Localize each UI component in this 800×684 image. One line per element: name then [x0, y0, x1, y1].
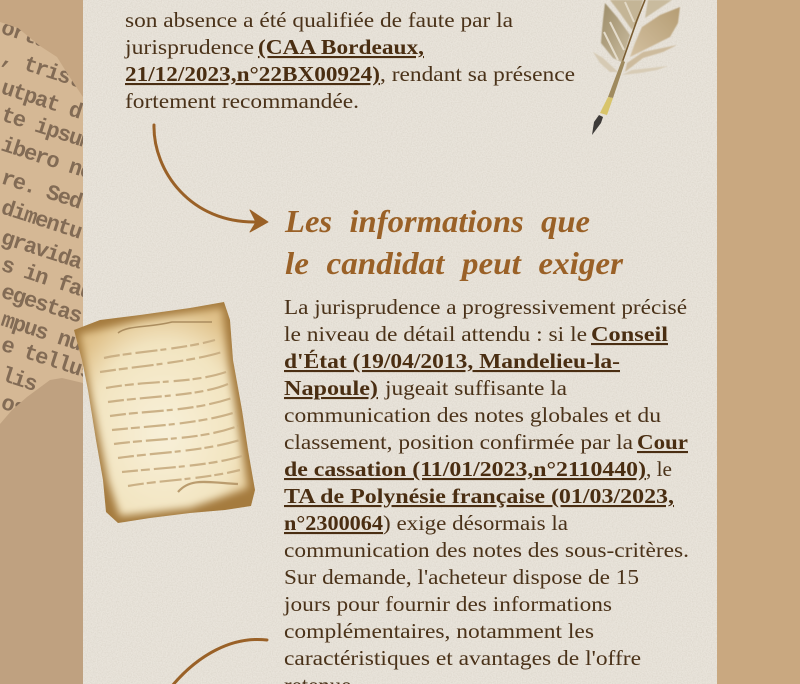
arrow: curved bottom [172, 639, 267, 684]
torn newspaper scrap: s in fauc [0, 253, 107, 310]
text block: jurisprudence paragraph: communication des notes des sous-critères. [284, 538, 689, 562]
text block: top paragraph: 21/12/2023,n°22BX00924) [125, 62, 380, 86]
torn newspaper scrap: dimentu [0, 196, 84, 245]
heading: le candidat peut exiger [285, 245, 624, 281]
text block: top paragraph [124, 8, 575, 113]
text block: jurisprudence paragraph: caractéristiques et avantages de l'offre [284, 646, 641, 670]
torn newspaper scrap [0, 22, 83, 684]
icon: feather quill [592, 0, 680, 135]
text block: jurisprudence paragraph: TA de Polynésie française (01/03/2023, [284, 484, 674, 508]
text block: top paragraph: , rendant sa présence [380, 62, 575, 86]
torn newspaper scrap: utpat d [0, 76, 84, 125]
heading [284, 203, 624, 281]
arrow: curved to heading [154, 125, 268, 232]
text block: jurisprudence paragraph: n°2300064 [284, 511, 384, 535]
text block: jurisprudence paragraph: Cour [637, 430, 688, 454]
text block: jurisprudence paragraph: le niveau de détail attendu : si le [284, 322, 587, 346]
text block: jurisprudence paragraph: Napoule) [284, 376, 378, 400]
torn newspaper scrap: re. Sed [0, 166, 84, 215]
torn newspaper scrap: mpus nu [0, 308, 84, 357]
torn newspaper scrap: egestas [0, 280, 84, 329]
text block: jurisprudence paragraph: de cassation (11/01/2023,n°2110440) [284, 457, 646, 481]
text block: jurisprudence paragraph: jours pour fournir des informations [283, 592, 612, 616]
torn newspaper scrap: , trist [0, 45, 84, 94]
text block: jurisprudence paragraph [283, 295, 689, 684]
text block: jurisprudence paragraph: d'État (19/04/2013, Mandelieu-la- [284, 349, 620, 373]
text block: jurisprudence paragraph: complémentaires, notamment les [284, 619, 594, 643]
text block: jurisprudence paragraph: ) exige désormais la [383, 511, 569, 535]
torn newspaper scrap: te ipsum [0, 103, 96, 156]
text block: jurisprudence paragraph: communication des notes globales et du [284, 403, 662, 427]
text block: jurisprudence paragraph: , le [646, 457, 672, 481]
text block: top paragraph: jurisprudence [124, 35, 254, 59]
heading: Les informations que [284, 203, 590, 239]
torn newspaper scrap: ibero ne [0, 133, 96, 186]
icon: parchment [74, 302, 255, 523]
text block: top paragraph: fortement recommandée. [125, 89, 359, 113]
text block: jurisprudence paragraph: Conseil [591, 322, 668, 346]
text block: top paragraph: (CAA Bordeaux, [258, 35, 424, 59]
text block: jurisprudence paragraph: classement, position confirmée par la [284, 430, 634, 454]
torn newspaper scrap: gravida [0, 226, 85, 276]
text block: top paragraph: son absence a été qualifiée de faute par la [125, 8, 514, 32]
text block: jurisprudence paragraph: jugeait suffisante la [384, 376, 568, 400]
text block: jurisprudence paragraph: La jurisprudence a progressivement précisé [284, 295, 687, 319]
paper panel [83, 0, 717, 684]
text block: jurisprudence paragraph: Sur demande, l'acheteur dispose de 15 [284, 565, 639, 589]
torn newspaper scrap: e tellus [0, 333, 96, 386]
